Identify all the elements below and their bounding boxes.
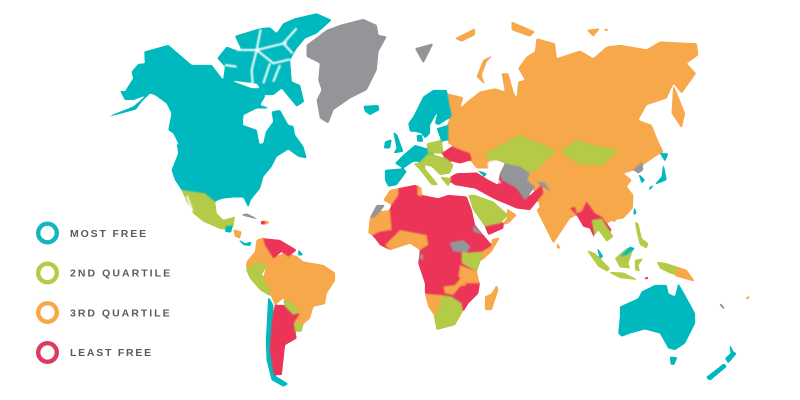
Dominican Republic [265, 221, 271, 225]
Oman and UAE [502, 208, 517, 225]
New Zealand [706, 343, 737, 381]
Western Sahara [370, 205, 385, 217]
Italy [413, 163, 438, 185]
legend: 2nd quartile: 2ND QUARTILE [70, 268, 172, 280]
Canadian Arctic Archipelago [217, 13, 332, 107]
Sea of Okhotsk and Kamchatka [672, 85, 685, 128]
Sri Lanka [557, 243, 561, 248]
Spain and Portugal [385, 168, 407, 187]
Uganda and Kenya [462, 252, 482, 272]
Tasmania [670, 357, 677, 365]
Svalbard [415, 43, 433, 63]
Mexico [182, 190, 235, 229]
Java [608, 272, 638, 280]
Gulf of Guinea states [385, 230, 428, 250]
Georgia [477, 170, 487, 177]
Fiji [745, 295, 750, 299]
Asian mainland [447, 38, 698, 243]
Philippines [635, 222, 648, 248]
Malaysian Borneo [620, 247, 635, 257]
Morocco [383, 188, 398, 205]
Timor [643, 276, 648, 279]
Yemen [485, 223, 503, 235]
Uruguay [294, 323, 303, 332]
Honduras and Nicaragua [233, 229, 242, 238]
Denmark [417, 135, 423, 142]
Central and Eastern Europe [418, 153, 453, 175]
New Caledonia [719, 304, 725, 309]
Thailand and Laos [592, 218, 613, 242]
Tanzania [458, 265, 479, 283]
Arctic islands [455, 22, 609, 42]
Canada, Alaska and United States [120, 45, 307, 207]
Paraguay [283, 300, 300, 315]
Kazakhstan [485, 135, 557, 173]
Central Asia [500, 163, 535, 200]
Zambia [443, 277, 467, 295]
Cuba [241, 213, 260, 220]
legend: least free: LEAST FREE [70, 347, 153, 359]
Ecuador and Peru [246, 262, 270, 296]
Taiwan [633, 207, 637, 215]
Nepal region [537, 182, 551, 192]
Guatemala and Belize [225, 225, 233, 233]
Caspian Sea [488, 160, 502, 183]
Eritrea [473, 225, 483, 235]
Haiti [261, 221, 265, 224]
Gabon [419, 254, 423, 259]
Mongolia [560, 140, 618, 165]
Namibia [425, 294, 442, 317]
Turkey to Pakistan [450, 173, 543, 210]
legend: most free: MOST FREE [70, 228, 148, 240]
South Korea [638, 173, 645, 183]
Greenland [307, 19, 387, 123]
United Kingdom [393, 132, 403, 153]
Western Europe [395, 145, 434, 168]
Nordic countries [408, 90, 452, 138]
legend: 3rd quartile: 3RD QUARTILE [70, 308, 172, 320]
Sumatra [587, 250, 610, 272]
Japan [648, 153, 668, 192]
Costa Rica and Panama [237, 238, 252, 246]
Tunisia [417, 185, 422, 197]
Russia and Asia [408, 22, 698, 243]
Hainan [612, 219, 616, 223]
Africa base [372, 185, 492, 312]
North America [103, 13, 387, 207]
Myanmar [570, 202, 612, 240]
Madagascar [485, 285, 498, 310]
Saudi Arabia [468, 195, 508, 227]
North Korea [633, 162, 643, 173]
Colombia, Brazil and Bolivia [246, 237, 335, 324]
Mauritania and Senegal [368, 210, 392, 235]
Venezuela and Guyana [263, 238, 297, 258]
Europe, Africa and Middle East [368, 132, 551, 330]
South Africa and Botswana [434, 295, 463, 330]
Borneo [615, 248, 633, 268]
Papua New Guinea [675, 267, 695, 282]
Southeast Asia and Oceania [557, 202, 750, 381]
Argentina [270, 305, 300, 375]
Chile [266, 297, 288, 387]
Latin America [182, 190, 335, 387]
Iceland [363, 105, 379, 115]
Ireland [384, 139, 392, 148]
Somalia [481, 237, 500, 261]
Gulf of California [186, 195, 193, 212]
legend [38, 224, 172, 362]
Novaya Zemlya [477, 55, 493, 85]
Poland [427, 140, 443, 153]
Sulawesi [635, 258, 643, 272]
Ukraine [442, 147, 472, 163]
Aleutian chain [103, 99, 143, 118]
Western New Guinea [657, 262, 680, 275]
French Guiana [298, 249, 303, 256]
Malaysia peninsula [597, 247, 603, 258]
world map [103, 13, 750, 387]
South Sudan [449, 240, 471, 253]
Greece [440, 177, 452, 187]
Baltic states [437, 125, 448, 142]
Australia [618, 283, 695, 350]
